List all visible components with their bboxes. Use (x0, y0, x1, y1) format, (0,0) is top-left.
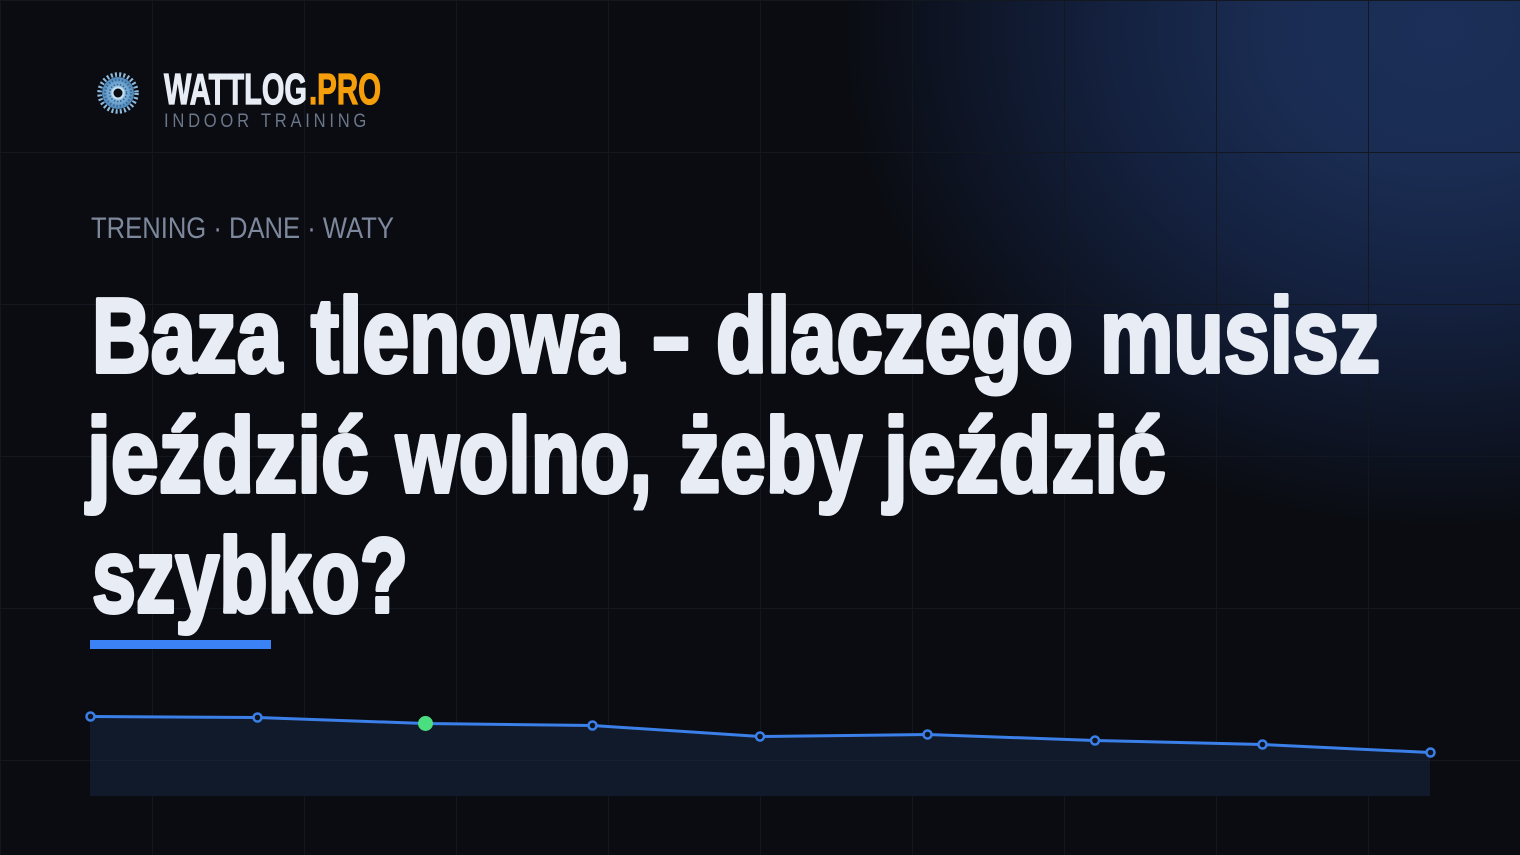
logo wordmark: .PRO (309, 65, 381, 114)
chart data points (86, 712, 1434, 756)
logo: cassette cog icon (100, 74, 136, 112)
logo tagline: INDOOR TRAINING (164, 110, 366, 131)
line chart (86, 712, 1434, 796)
highlighted data point (418, 716, 433, 731)
title: jeździć (882, 397, 1166, 515)
logo wordmark: WATTLOG (164, 65, 307, 114)
title: dlaczego (716, 277, 1073, 395)
title: – (653, 277, 689, 395)
title: musisz (1100, 277, 1380, 395)
chart area fill (90, 716, 1430, 796)
title: szybko? (92, 517, 408, 635)
chart horizontal grid line over fill (90, 760, 1430, 762)
chart line (90, 716, 1430, 752)
title: żeby (679, 397, 862, 515)
title: jeździć (85, 397, 369, 515)
title: tlenowa (311, 277, 625, 395)
title: Baza (92, 277, 283, 395)
title underline accent (90, 640, 271, 649)
title: wolno, (395, 397, 652, 515)
title (85, 277, 1380, 635)
eyebrow: category label: TRENING · DANE · WATY (91, 212, 394, 245)
